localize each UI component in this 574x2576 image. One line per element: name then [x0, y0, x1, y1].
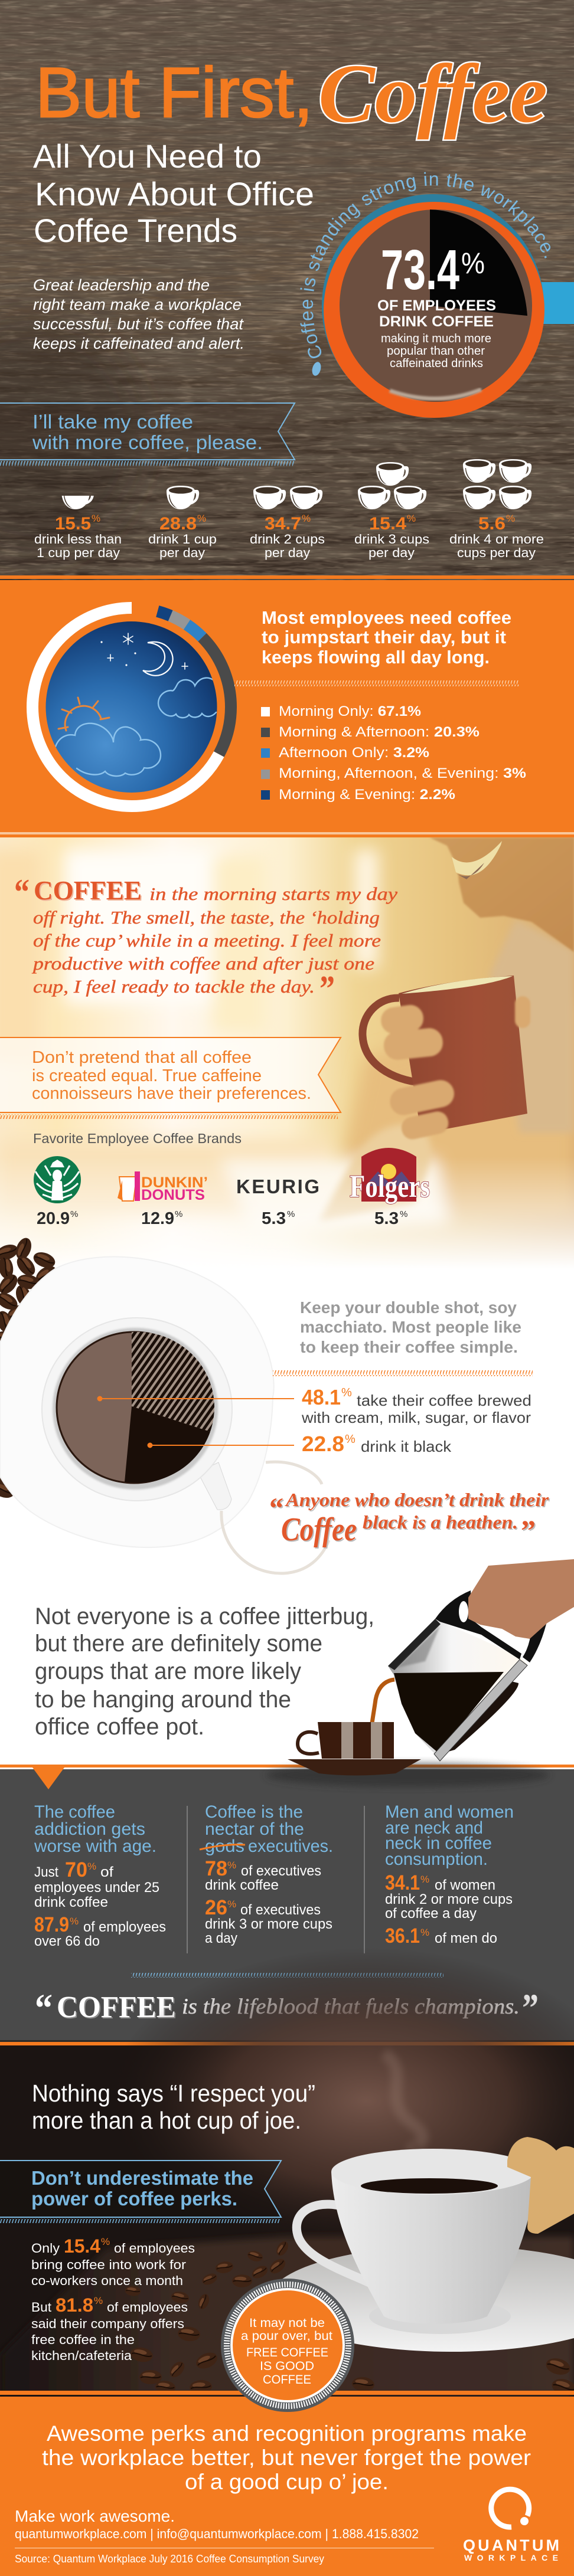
- heading: respect: more than a hot cup of joe.: [32, 2107, 301, 2134]
- panel: time of day: [0, 575, 574, 837]
- text: keep it simple: macchiato. Most people like: [300, 1318, 521, 1336]
- cup stats: drink less than: [34, 532, 122, 546]
- badge: free coffee: It may not be: [249, 2316, 325, 2330]
- carafe handle: [435, 1590, 546, 1662]
- heading: time of day: Most employees need coffee: [262, 607, 511, 628]
- cup stats: 34.7: [265, 514, 301, 533]
- curved heading around mug: Coffee is standing strong in the workplace.: [300, 172, 550, 359]
- column: age: [34, 1802, 166, 1949]
- ribbon: coffee preferences: is created equal. True caffeine: [32, 1066, 262, 1085]
- column: executives: nectar of the: [205, 1819, 304, 1839]
- cup stats: %: [197, 513, 206, 524]
- intro text: keeps it caffeinated and alert.: [33, 335, 244, 352]
- stat: 73.4 percent: DRINK COFFEE: [379, 313, 494, 330]
- cup stats: 15.5: [55, 514, 91, 533]
- stat: 73.4 percent: making it much more: [381, 332, 491, 345]
- ribbon: coffee perks: [0, 2161, 281, 2223]
- icon: one cup: [167, 486, 199, 509]
- quote: coffee in the morning: [14, 872, 397, 1009]
- column: gender: consumption.: [385, 1850, 488, 1869]
- icon: half cup: [61, 496, 94, 509]
- brand percentages: %: [287, 1209, 295, 1219]
- coffee in carafe: [394, 1672, 504, 1753]
- quote: coffee in the morning: of the cup’ while in a meeting. I feel more: [33, 930, 381, 951]
- heading: jitterbug: [35, 1603, 374, 1740]
- badge: free coffee: a pour over, but: [241, 2329, 332, 2343]
- column: age: drink coffee: [34, 1894, 108, 1910]
- legend: Afternoon Only: 3.2%: [279, 745, 429, 761]
- panel: closing message: of a good cup o’ joe.: [185, 2470, 389, 2494]
- logo: Quantum Workplace: [463, 2489, 559, 2562]
- brand percentages: 5.3: [374, 1209, 399, 1228]
- icon: four cups: [463, 459, 531, 509]
- column: gender: of women: [435, 1877, 495, 1893]
- photo: cup on saucer with pie chart: [0, 1257, 294, 1547]
- stats: coffee perks: 81.8: [56, 2294, 93, 2316]
- column: age: addiction gets: [34, 1819, 145, 1839]
- stats: coffee perks: co-workers once a month: [31, 2273, 183, 2288]
- section line and dark panel: [0, 1763, 574, 2040]
- logo: Starbucks: [34, 1156, 81, 1203]
- cup stats: cups per day: [457, 545, 536, 560]
- photo: heart cookie: [507, 2137, 574, 2234]
- stats: coffee perks: bring coffee into work for: [31, 2257, 186, 2272]
- column: executives: of executives: [241, 1863, 321, 1879]
- stats: coffee perks: %: [101, 2236, 110, 2247]
- badge: free coffee: [221, 2279, 354, 2412]
- brand percentages: 12.9: [141, 1209, 174, 1228]
- text: keep it simple: Keep your double shot, soy: [300, 1298, 517, 1317]
- panel: closing message: the workplace better, but never forget the power: [42, 2446, 531, 2470]
- footer contact: Source: Quantum Workplace July 2016 Coffee Consumption Survey: [15, 2553, 324, 2565]
- heading: jitterbug: office coffee pot.: [35, 1714, 204, 1740]
- ribbon: more coffee: [0, 403, 295, 466]
- brand percentages: 5.3: [262, 1209, 286, 1228]
- column: executives: drink coffee: [205, 1877, 279, 1893]
- column: age: Just: [34, 1864, 58, 1880]
- donut chart: coffee by time of day: [32, 608, 231, 806]
- badge: free coffee: COFFEE: [263, 2373, 311, 2387]
- quote: lifeblood: ”: [522, 1985, 539, 2030]
- intro text: Great leadership and the: [33, 276, 210, 294]
- text: keep it simple: to keep their coffee simple.: [300, 1338, 518, 1356]
- column: executives: [200, 1802, 333, 1946]
- stats: coffee perks: %: [94, 2295, 103, 2306]
- column: age: %: [70, 1916, 79, 1927]
- quote: heathen: [269, 1489, 549, 1548]
- ribbon: coffee preferences: connoisseurs have their preferences.: [32, 1084, 311, 1103]
- column: gender: of men do: [435, 1930, 497, 1946]
- quote: coffee in the morning: in the morning starts my day: [149, 883, 397, 904]
- poured coffee stream: [372, 1680, 394, 1723]
- small coffee cup: [288, 1722, 421, 1775]
- logo: Dunkin Donuts: DONUTS: [141, 1187, 205, 1203]
- quote: heathen: Anyone who doesn’t drink their: [285, 1489, 549, 1510]
- badge: free coffee: FREE COFFEE: [246, 2346, 328, 2359]
- panel: closing message: Awesome perks and recognition programs make: [47, 2421, 527, 2446]
- heading: jitterbug: but there are definitely some: [35, 1631, 322, 1657]
- panel: hot cup of joe photo: [0, 1947, 574, 2398]
- legend: Morning Only: 67.1%: [279, 703, 421, 719]
- column: executives: %: [227, 1899, 236, 1910]
- stats: coffee perks: [31, 2235, 195, 2363]
- decoration: steam: [384, 2054, 423, 2148]
- logo: Dunkin Donuts: [118, 1171, 208, 1203]
- title: But First,: [35, 53, 313, 132]
- cup stats: 15.4: [369, 514, 406, 533]
- subtitle: All You Need to: [33, 138, 262, 175]
- decoration: coffee stain ring: [221, 1462, 329, 1573]
- quote: coffee in the morning: COFFEE: [34, 876, 142, 905]
- column: age: The coffee: [34, 1802, 115, 1822]
- heading: jitterbug: groups that are more likely: [35, 1658, 301, 1684]
- stats: coffee perks: of employees: [114, 2241, 195, 2256]
- cup stats: drink 2 cups: [250, 532, 325, 546]
- heading: time of day: keeps flowing all day long.: [262, 647, 490, 667]
- icon: coffee mug from above: [322, 194, 574, 418]
- column: gender: %: [420, 1874, 429, 1885]
- column: gender: of coffee a day: [385, 1906, 477, 1922]
- column: gender: %: [420, 1927, 429, 1938]
- quote: lifeblood: COFFEE: [57, 1991, 176, 2024]
- quote: heathen: ”: [521, 1514, 536, 1547]
- quote: lifeblood: [35, 1985, 539, 2030]
- panel: closing message: [0, 2391, 574, 2576]
- intro text: [33, 276, 244, 352]
- heading: time of day: to jumpstart their day, but it: [262, 627, 506, 647]
- column: gender: 36.1: [385, 1924, 420, 1947]
- quote: coffee in the morning: productive with coffee and after just one: [32, 953, 374, 974]
- stats: cream versus black: %: [341, 1386, 352, 1399]
- stats: cream versus black: with cream, milk, sugar, or flavor: [301, 1409, 531, 1426]
- column: executives: Coffee is the: [205, 1802, 303, 1822]
- column: executives: drink 3 or more cups: [205, 1916, 332, 1932]
- logo: Folgers: [350, 1148, 430, 1204]
- cup stats: 1 cup per day: [37, 545, 120, 560]
- heading: jitterbug: to be hanging around the: [35, 1687, 291, 1713]
- pie wedge: 26.6 percent non-drinkers: [430, 210, 527, 316]
- stat: 73.4 percent: [377, 238, 496, 370]
- column: executives: 78: [205, 1857, 227, 1880]
- chart: cups per day: [34, 459, 544, 560]
- stat: 73.4 percent: popular than other: [387, 345, 485, 358]
- brand percentages: 20.9: [37, 1209, 70, 1228]
- heading: time of day: [262, 607, 511, 667]
- icon: two cups: [253, 486, 322, 509]
- quote: lifeblood: is the lifeblood that fuels champions.: [182, 1995, 520, 2019]
- stats: coffee perks: Only: [31, 2241, 60, 2256]
- photo: coffee beans: [0, 1236, 59, 1501]
- column: executives: 26: [205, 1896, 227, 1919]
- column: executives: executives.: [248, 1837, 333, 1856]
- stats: coffee perks: free coffee in the: [31, 2332, 135, 2347]
- footer contact: quantumworkplace.com | info@quantumworkplace.com | 1.888.415.8302: [15, 2526, 419, 2541]
- cup stats: %: [92, 513, 100, 524]
- column: gender: neck in coffee: [385, 1834, 492, 1853]
- stats: cream versus black: %: [345, 1433, 356, 1446]
- column: executives: of executives: [240, 1902, 321, 1918]
- ribbon: more coffee: I’ll take my coffee: [32, 411, 193, 433]
- legend: [261, 703, 526, 803]
- background: wood plank header: [0, 0, 574, 580]
- column: executives: gods: [205, 1837, 244, 1856]
- quote: heathen: black is a heathen.: [363, 1511, 518, 1533]
- column: age: 70: [65, 1858, 87, 1881]
- column: age: of employees: [83, 1919, 166, 1935]
- stats: cream versus black: drink it black: [361, 1438, 452, 1455]
- cup stats: drink 4 or more: [449, 532, 544, 546]
- quote: lifeblood: “: [35, 1985, 53, 2030]
- column: age: %: [87, 1861, 96, 1872]
- cup stats: %: [506, 513, 515, 524]
- hand: [468, 1559, 574, 1639]
- column: age: 87.9: [34, 1913, 69, 1936]
- carafe base: [444, 1681, 518, 1753]
- cup stats: per day: [368, 545, 415, 560]
- stats: coffee perks: 15.4: [64, 2235, 100, 2257]
- illustration: day and night sky: [46, 621, 217, 793]
- column: gender: 34.1: [385, 1871, 420, 1894]
- logo: Quantum Workplace: QUANTUM: [463, 2536, 559, 2554]
- photo: scattered beans: [125, 2239, 574, 2398]
- title: Coffee: [318, 47, 547, 140]
- carafe glass: [388, 1619, 527, 1759]
- quote: coffee in the morning: off right. The smell, the taste, the ‘holding: [33, 907, 380, 928]
- photo: woman with a red mug: [0, 837, 574, 1269]
- intro text: right team make a workplace: [33, 296, 242, 313]
- stats: coffee perks: But: [31, 2300, 51, 2315]
- logo: Keurig: KEURIG: [236, 1176, 319, 1197]
- ribbon: coffee perks: Don’t underestimate the: [31, 2167, 253, 2189]
- logo: Dunkin Donuts: DUNKIN’: [141, 1174, 208, 1191]
- ribbon: coffee preferences: [0, 1037, 341, 1119]
- stats: coffee perks: said their company offers: [31, 2316, 184, 2331]
- column: age: of: [100, 1864, 113, 1880]
- subtitle: Coffee Trends: [34, 212, 237, 249]
- column: gender: are neck and: [385, 1818, 483, 1838]
- stats: cream versus black: [301, 1385, 531, 1456]
- intro text: successful, but it’s coffee that: [33, 315, 244, 333]
- cup stats: drink 3 cups: [354, 532, 429, 546]
- leader lines: [98, 1396, 294, 1447]
- logo: Folgers: Folgers: [350, 1168, 430, 1204]
- subtitle: [33, 138, 314, 249]
- quote: coffee in the morning: ”: [319, 969, 335, 1009]
- stats: cream versus black: 22.8: [302, 1432, 344, 1456]
- cup stats: [34, 513, 544, 560]
- text: keep it simple: [300, 1298, 521, 1356]
- legend: Morning, Afternoon, & Evening: 3%: [279, 765, 526, 781]
- stats: cream versus black: 48.1: [302, 1385, 341, 1409]
- stat: 73.4 percent: OF EMPLOYEES: [377, 297, 496, 314]
- column: age: worse with age.: [34, 1837, 156, 1856]
- heading: respect: [32, 2080, 315, 2134]
- cup stats: per day: [159, 545, 205, 560]
- logo: Quantum Workplace: WORKPLACE: [464, 2553, 558, 2562]
- ribbon: coffee perks: power of coffee perks.: [31, 2188, 237, 2210]
- quote: heathen: “: [269, 1491, 283, 1524]
- stat: 73.4 percent: caffeinated drinks: [390, 357, 483, 370]
- pie chart: how coffee is taken: [57, 1332, 214, 1483]
- subtitle: Know About Office: [35, 175, 314, 212]
- cup stats: 28.8: [159, 514, 197, 533]
- column: gender: drink 2 or more cups: [385, 1891, 513, 1907]
- icon: three cups: [358, 462, 426, 509]
- column: executives: a day: [205, 1930, 237, 1946]
- stats: coffee perks: of employees: [107, 2300, 188, 2315]
- stat: 73.4 percent: 73.4: [381, 238, 459, 302]
- stats: coffee perks: kitchen/cafeteria: [31, 2348, 132, 2363]
- heading: jitterbug: Not everyone is a coffee jitterbug,: [35, 1603, 374, 1629]
- quote: coffee in the morning: “: [14, 872, 30, 912]
- cup stats: %: [407, 513, 416, 524]
- heading: respect: Nothing says “I respect you”: [32, 2080, 315, 2107]
- panel: favorite coffee brands: Favorite Employee Coffee Brands: [33, 1131, 242, 1146]
- badge: free coffee: IS GOOD: [260, 2359, 314, 2373]
- column: executives: %: [227, 1860, 236, 1871]
- brand percentages: %: [70, 1209, 78, 1219]
- cup stats: drink 1 cup: [148, 532, 217, 546]
- legend: Morning & Evening: 2.2%: [279, 787, 455, 803]
- panel: favorite coffee brands: [33, 1131, 430, 1228]
- ribbon: coffee preferences: Don’t pretend that all coffee: [32, 1048, 252, 1067]
- brand percentages: %: [400, 1209, 407, 1219]
- brand percentages: [37, 1209, 407, 1228]
- panel: who drinks coffee: [34, 1802, 539, 2030]
- column: age: employees under 25: [34, 1880, 159, 1896]
- column: gender: [385, 1802, 514, 1947]
- legend: Morning & Afternoon: 20.3%: [279, 724, 480, 740]
- quote: coffee in the morning: cup, I feel ready to tackle the day.: [33, 976, 315, 997]
- cup stats: per day: [265, 545, 310, 560]
- column: age: over 66 do: [34, 1933, 100, 1949]
- brand percentages: %: [175, 1209, 182, 1219]
- column: gender: Men and women: [385, 1802, 514, 1822]
- photo: hand pouring coffee from carafe: [288, 1559, 574, 1775]
- cup stats: %: [302, 513, 311, 524]
- ribbon: more coffee: with more coffee, please.: [32, 431, 263, 453]
- footer contact: Make work awesome.: [15, 2507, 175, 2525]
- cup stats: 5.6: [478, 514, 505, 533]
- stat: 73.4 percent: %: [461, 247, 485, 280]
- quote: heathen: Coffee: [281, 1511, 357, 1548]
- title: [35, 47, 547, 140]
- stats: cream versus black: take their coffee brewed: [357, 1392, 531, 1409]
- footer contact: [15, 2507, 434, 2565]
- photo: white cup and saucer: [269, 2149, 574, 2352]
